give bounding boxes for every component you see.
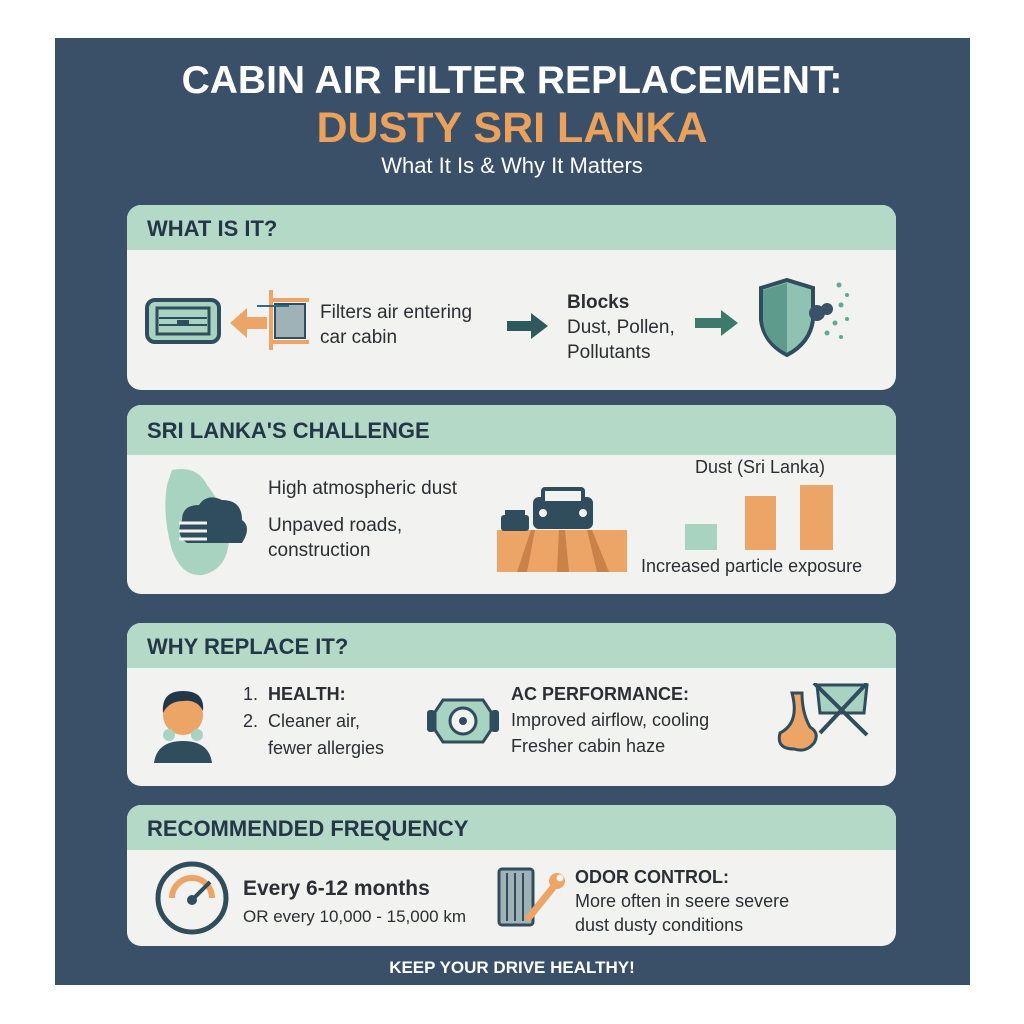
icon: filter with arrow	[230, 290, 309, 350]
text: blocks	[567, 292, 675, 363]
panel: recommended frequency	[127, 805, 896, 946]
text: blocks: Dust, Pollen,	[567, 317, 675, 338]
text: ac performance: AC PERFORMANCE:	[511, 684, 689, 704]
text: odor control	[575, 867, 789, 935]
panel: sri lanka's challenge: Unpaved roads,	[268, 515, 402, 536]
text: health: 2. Cleaner air,	[243, 711, 360, 731]
text: odor control: dust dusty conditions	[575, 915, 743, 935]
heading	[127, 805, 896, 850]
arrow	[695, 310, 738, 336]
text: challenge: High atmospheric dust	[268, 478, 457, 499]
heading: RECOMMENDED FREQUENCY	[147, 816, 468, 841]
arrow	[507, 313, 548, 339]
footer: KEEP YOUR DRIVE HEALTHY!	[389, 958, 635, 977]
icon: nose no odor	[778, 683, 869, 752]
text: odor control: More often in seere severe	[575, 891, 789, 911]
text: every 6-12 months: Every 6-12 months	[243, 877, 430, 900]
text: odor control: ODOR CONTROL:	[575, 867, 729, 887]
text: ac performance: Fresher cabin haze	[511, 736, 665, 756]
icon: ac fan	[427, 698, 499, 744]
icon: road with cars	[497, 487, 627, 572]
text: health: fewer allergies	[268, 738, 384, 758]
heading	[127, 205, 896, 250]
panel: sri lanka's challenge	[127, 405, 896, 594]
text: health	[243, 684, 384, 758]
heading: WHAT IS IT?	[147, 216, 277, 241]
panel: sri lanka's challenge: construction	[268, 540, 370, 561]
text: blocks: Blocks	[567, 292, 629, 313]
icon: shield	[759, 278, 849, 358]
text: filters air: Filters air entering	[320, 302, 472, 323]
panel: why replace it	[127, 623, 896, 786]
text: ac performance: Improved airflow, cooling	[511, 710, 709, 730]
text: ac performance	[511, 684, 709, 756]
subtitle: dusty sri lanka: DUSTY SRI LANKA	[316, 104, 708, 152]
text: filters air: car cabin	[320, 327, 397, 348]
icon: person sneezing	[154, 691, 212, 763]
tagline: What It Is & Why It Matters	[381, 153, 643, 178]
bar chart	[641, 457, 862, 576]
text: health: 1. HEALTH:	[243, 684, 346, 704]
icon: map with cloud	[165, 469, 247, 576]
heading: WHY REPLACE IT?	[147, 634, 348, 659]
panel: recommended frequency: OR every 10,000 - 15,000 km	[243, 907, 466, 926]
title: CABIN AIR FILTER REPLACEMENT:	[182, 59, 842, 102]
heading	[127, 623, 896, 668]
chart caption: Increased particle exposure	[641, 556, 862, 576]
heading	[127, 405, 896, 455]
icon: vent	[145, 298, 221, 344]
text: blocks: Pollutants	[567, 342, 650, 363]
icon: gauge	[156, 862, 228, 934]
panel: what is it	[127, 205, 896, 390]
text: filters air	[320, 302, 472, 348]
icon: filter and wrench	[498, 868, 565, 926]
heading: SRI LANKA'S CHALLENGE	[147, 418, 430, 443]
chart title: Dust (Sri Lanka)	[695, 457, 825, 477]
